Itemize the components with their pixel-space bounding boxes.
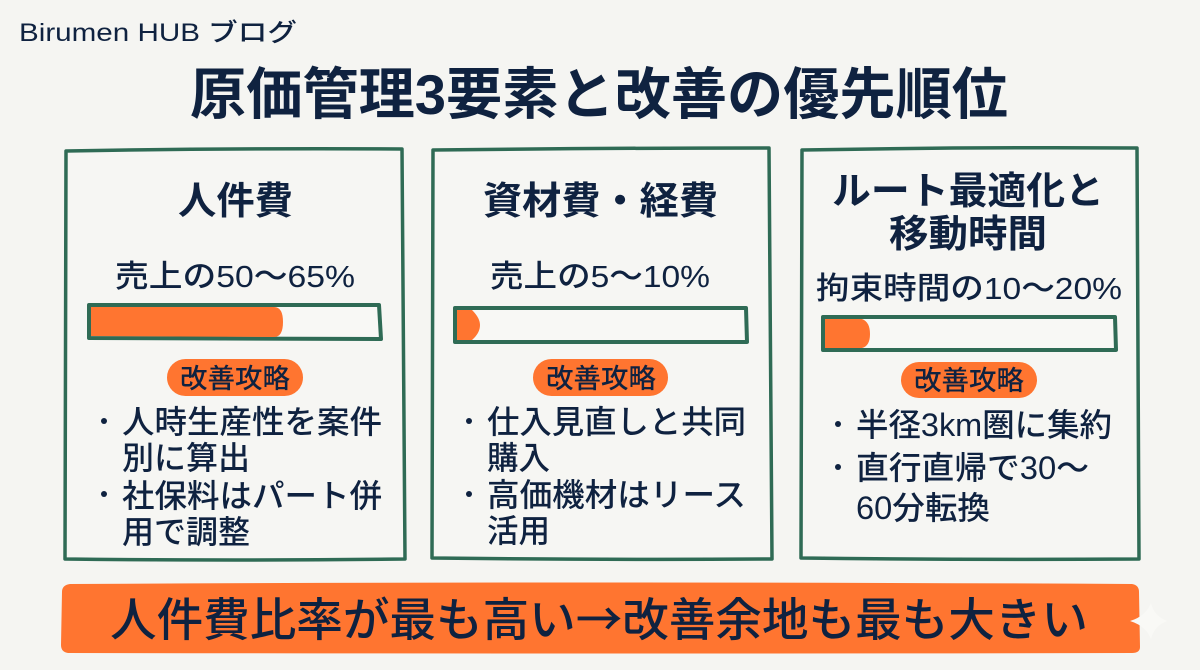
panel heading: route optimization: ルート最適化と: [832, 171, 1104, 213]
bullet list: materials: 購入: [487, 440, 550, 476]
progress bar: labor cost: [89, 305, 381, 339]
panel heading: materials: 資材費・経費: [483, 181, 718, 223]
bullet list: materials: 高価機材はリース: [487, 477, 746, 513]
icon: sparkle: [1130, 603, 1167, 639]
conclusion banner: 人件費比率が最も高い→改善余地も最も大きい: [110, 584, 1088, 650]
bullet list: route: 60分転換: [856, 490, 990, 526]
ratio text: materials: 売上の5〜10%: [490, 259, 710, 294]
brand label: Birumen HUB ブログ: [19, 19, 297, 47]
panel heading: labor cost: 人件費: [178, 181, 293, 223]
panel heading: route optimization: 移動時間: [889, 214, 1047, 256]
progress bar: materials: [455, 308, 747, 342]
ratio text: labor cost: 売上の50〜65%: [115, 259, 355, 294]
badge: improvement strategy: 改善攻略: [546, 364, 656, 394]
ratio text: route: 拘束時間の10〜20%: [816, 271, 1122, 306]
bullet list: materials: 仕入見直しと共同: [487, 404, 746, 440]
bullet list: materials: 活用: [487, 513, 550, 549]
bullet list: labor cost: 別に算出: [122, 440, 250, 476]
bullet list: route: 半径3km圏に集約: [856, 407, 1112, 443]
progress bar: route: [823, 317, 1116, 350]
panel: labor cost: [65, 149, 405, 560]
badge: improvement strategy: [901, 362, 1037, 398]
bullet list: route: 直行直帰で30〜: [856, 450, 1089, 486]
bullet list: labor cost: 人時生産性を案件: [122, 404, 382, 440]
panel: materials and expenses: [432, 148, 772, 559]
badge: improvement strategy: 改善攻略: [914, 366, 1024, 396]
bullet list: labor cost: 用で調整: [122, 514, 250, 550]
bullet list: labor cost: 社保料はパート併: [122, 478, 382, 514]
badge: improvement strategy: [167, 359, 303, 396]
title: 原価管理3要素と改善の優先順位: [190, 63, 1008, 126]
bullet list: labor cost: [101, 404, 382, 550]
badge: improvement strategy: 改善攻略: [180, 364, 290, 394]
bullet list: materials: [466, 404, 746, 549]
panel: route optimization: [801, 148, 1139, 559]
bullet list: route: [835, 407, 1112, 526]
panel heading: route optimization: [832, 171, 1104, 256]
badge: improvement strategy: [533, 359, 668, 396]
